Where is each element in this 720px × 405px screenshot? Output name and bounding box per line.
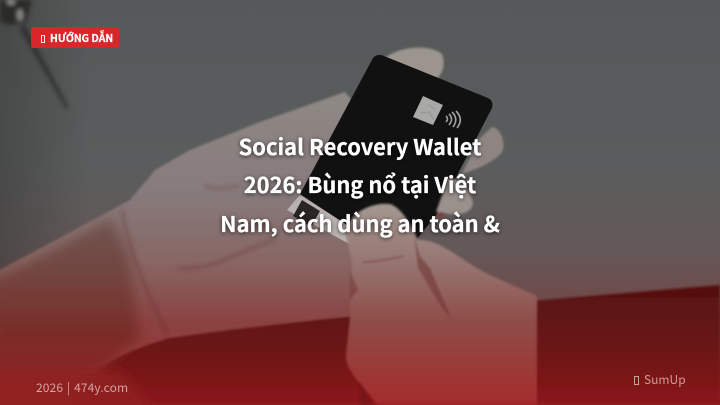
footer: year and site: 2026 | 474y.com xyxy=(36,379,128,396)
category badge xyxy=(31,27,119,48)
forearm shading xyxy=(0,218,140,405)
palm creases xyxy=(122,186,275,335)
contactless icon xyxy=(446,111,460,128)
chip xyxy=(413,96,443,125)
top finger behind card xyxy=(385,48,444,84)
left hand and arm xyxy=(0,92,400,405)
right hand xyxy=(345,204,537,405)
title xyxy=(219,130,501,242)
title: 2026: Bùng nổ tại Việt xyxy=(244,169,476,200)
title: Social Recovery Wallet xyxy=(239,130,481,162)
category badge: HƯỚNG DẪN xyxy=(50,30,113,45)
title: Nam, cách dùng an toàn & xyxy=(220,208,500,238)
card white end strip xyxy=(287,195,358,246)
fingers on right of card xyxy=(436,127,503,218)
lower left red falloff xyxy=(0,370,160,405)
footer: image source: SumUp xyxy=(644,371,686,388)
black card xyxy=(287,55,492,260)
pen in top-left corner xyxy=(0,0,69,109)
desk surface xyxy=(0,285,720,405)
